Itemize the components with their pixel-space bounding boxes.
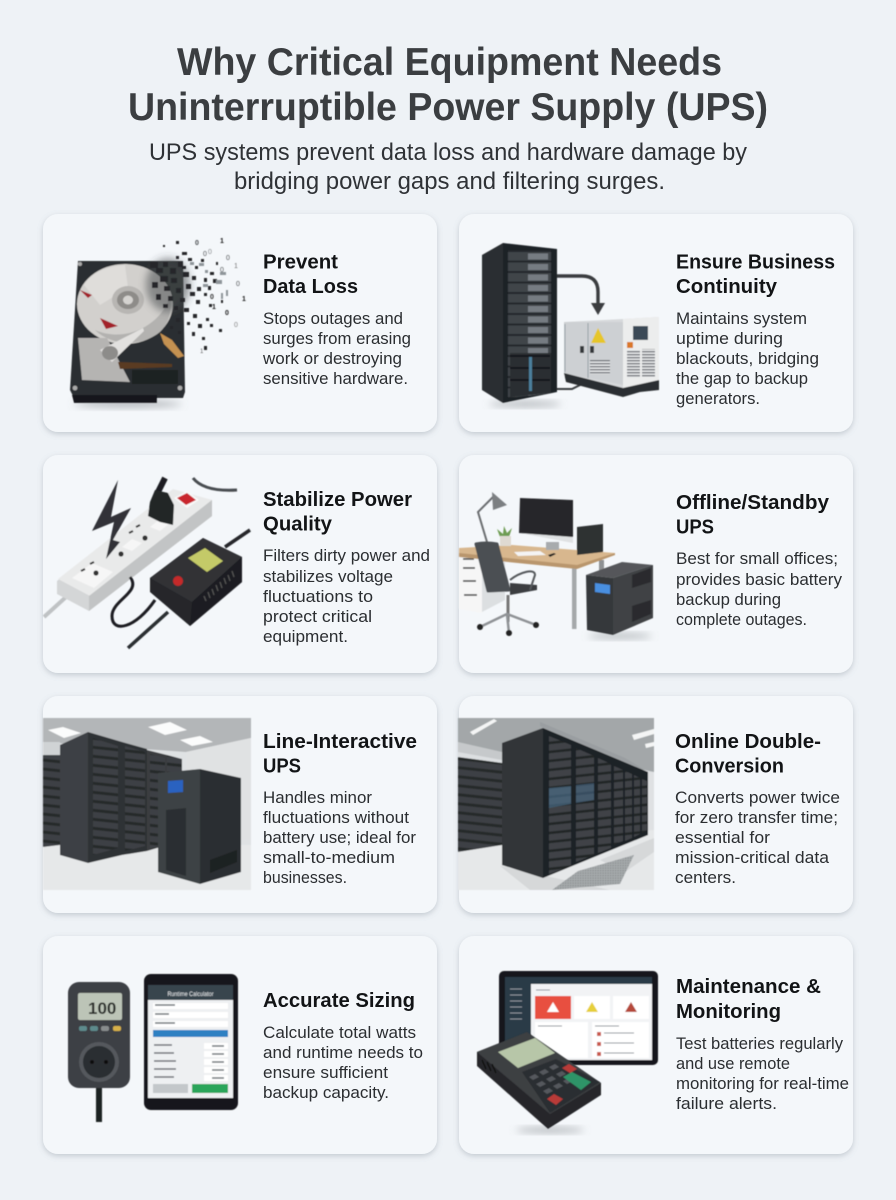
icon: power strip and voltage stabilizer <box>44 478 250 648</box>
description: stabilizes voltage <box>263 568 393 586</box>
icon: shattering hard drive: 0 <box>225 310 229 317</box>
description: uptime during <box>676 330 783 348</box>
heading <box>676 492 830 538</box>
icon: handheld tester <box>477 1032 601 1132</box>
heading: Data Loss <box>263 276 358 298</box>
subtitle: bridging power gaps and filtering surges. <box>234 168 665 195</box>
title: Why Critical Equipment Needs <box>177 41 722 84</box>
heading: UPS <box>263 756 301 778</box>
icon: shattering hard drive: 0 <box>208 249 212 256</box>
heading <box>676 976 821 1023</box>
description <box>263 789 417 887</box>
description: complete outages. <box>676 611 807 629</box>
panel: stabilize power quality <box>43 455 437 673</box>
heading: Offline/Standby <box>676 492 830 514</box>
description <box>675 789 840 887</box>
description: and use remote <box>676 1055 790 1073</box>
icon: shattering hard drive: 0 <box>203 251 207 258</box>
icon: home office desk with ups <box>459 492 653 638</box>
description: Handles minor <box>263 789 373 807</box>
icon: runtime calculator tablet <box>144 974 238 1110</box>
description: failure alerts. <box>676 1095 777 1113</box>
description <box>263 547 430 646</box>
arrow: rack to generator <box>557 276 605 315</box>
description: fluctuations to <box>263 588 373 606</box>
description: fluctuations without <box>263 809 409 827</box>
description: Converts power twice <box>675 789 840 807</box>
icon: shattering hard drive: 1 <box>234 263 238 270</box>
description <box>676 550 843 629</box>
description: generators. <box>676 390 760 408</box>
description: essential for <box>675 829 771 847</box>
description: backup capacity. <box>263 1084 389 1102</box>
panel: accurate sizing <box>43 936 437 1154</box>
description: and runtime needs to <box>263 1044 423 1062</box>
icon: shattering hard drive: 0 <box>234 322 238 329</box>
subtitle <box>149 139 748 195</box>
icon: shattering hard drive: 1 <box>220 238 224 245</box>
heading: Maintenance & <box>676 976 821 998</box>
description: battery use; ideal for <box>263 829 417 847</box>
icon: power meter: 100 <box>88 999 116 1018</box>
description: Best for small offices; <box>676 550 838 568</box>
icon: shattering hard drive: 0 <box>236 281 240 288</box>
description: sensitive hardware. <box>263 370 408 388</box>
heading <box>263 252 358 298</box>
icon: shattering hard drive: 0 <box>220 267 224 274</box>
heading <box>676 252 835 298</box>
description: Stops outages and <box>263 310 403 328</box>
heading: Monitoring <box>676 1001 781 1023</box>
description: blackouts, bridging <box>676 350 819 368</box>
description: for zero transfer time; <box>675 809 838 827</box>
heading: Conversion <box>675 756 784 778</box>
description <box>262 310 411 388</box>
icon: shattering hard drive: 0 <box>226 255 230 262</box>
description: small-to-medium <box>263 849 395 867</box>
description: mission-critical data <box>675 849 830 867</box>
heading: Accurate Sizing <box>263 990 415 1012</box>
panel: prevent data loss <box>43 214 437 432</box>
description <box>263 1024 423 1102</box>
description: centers. <box>675 869 736 887</box>
heading: Line-Interactive <box>263 731 417 753</box>
description: provides basic battery <box>676 571 843 589</box>
icon: server rack feeding generator <box>482 243 659 406</box>
description: Maintains system <box>676 310 807 328</box>
subtitle: UPS systems prevent data loss and hardware damage by <box>149 139 748 166</box>
description: equipment. <box>263 628 348 646</box>
panel: ensure business continuity <box>459 214 853 432</box>
description <box>676 310 819 408</box>
icon: shattering hard drive: 0 <box>210 294 214 301</box>
heading <box>263 489 412 536</box>
description: surges from erasing <box>263 330 411 348</box>
description: protect critical <box>263 608 372 626</box>
heading: Prevent <box>263 252 338 274</box>
description: Calculate total watts <box>263 1024 416 1042</box>
description: work or destroying <box>262 350 402 368</box>
heading: Online Double- <box>675 731 821 753</box>
description <box>676 1035 849 1113</box>
description: the gap to backup <box>676 370 808 388</box>
icon: shattering hard drive: 1 <box>242 296 246 303</box>
heading <box>263 731 417 778</box>
panel: online double-conversion <box>458 696 853 913</box>
icon: shattering hard drive: 1 <box>200 349 204 355</box>
description: ensure sufficient <box>263 1064 388 1082</box>
heading: Quality <box>263 514 333 536</box>
panel: offline standby ups <box>459 455 853 673</box>
description: businesses. <box>263 869 347 887</box>
icon: power meter <box>68 982 130 1122</box>
icon: runtime calculator tablet: Runtime Calculator <box>168 991 214 998</box>
description: monitoring for real-time <box>676 1075 849 1093</box>
description: Test batteries regularly <box>676 1035 844 1053</box>
image: server room with tower ups <box>43 718 251 890</box>
description: backup during <box>676 591 781 609</box>
icon: shattering hard drive: 1 <box>212 304 216 311</box>
icon: shattering hard drive <box>70 238 246 407</box>
icon: shattering hard drive: 0 <box>195 240 199 247</box>
heading: Continuity <box>676 276 778 298</box>
title: Uninterruptible Power Supply (UPS) <box>128 86 768 129</box>
image: data center racks <box>458 718 654 890</box>
panel: maintenance and monitoring <box>459 936 853 1154</box>
description: Filters dirty power and <box>263 547 430 565</box>
heading: UPS <box>676 516 714 538</box>
heading: Stabilize Power <box>263 489 412 511</box>
title <box>128 41 768 129</box>
heading <box>675 731 821 778</box>
panel: line-interactive ups <box>43 696 437 913</box>
heading: Ensure Business <box>676 252 835 274</box>
icon: monitoring dashboard <box>499 971 658 1065</box>
